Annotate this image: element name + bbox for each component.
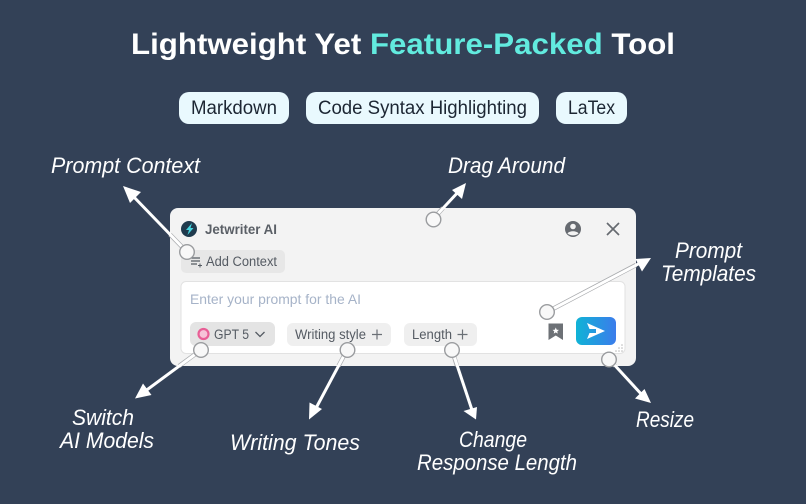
icon: close — [607, 223, 619, 235]
label: Change Response Length — [417, 427, 577, 475]
arrow: drag around — [426, 183, 466, 227]
button: Length — [404, 323, 477, 346]
label: Prompt Templates: Templates — [661, 261, 756, 286]
icon: user profile — [565, 221, 581, 237]
label: Resize: Resize — [636, 407, 694, 432]
icon: Jetwriter logo — [181, 221, 197, 237]
arrow: change response length — [445, 343, 477, 420]
title: Lightweight Yet Feature-Packed Tool — [131, 28, 675, 61]
label: Switch AI Models: Switch — [72, 405, 134, 430]
pill: LaTex — [556, 92, 627, 124]
pill: Code Syntax Highlighting — [306, 92, 539, 124]
button: Writing style — [287, 323, 391, 346]
button: send — [576, 317, 616, 345]
dropdown: GPT 5: GPT 5 — [214, 327, 249, 342]
arrow: prompt context — [123, 186, 194, 259]
label: Drag Around: Drag Around — [448, 153, 566, 178]
icon: resize grip — [615, 344, 623, 352]
label: Prompt Context: Prompt Context — [51, 153, 201, 178]
prompt input — [181, 282, 625, 354]
placeholder text: Enter your prompt for the AI — [190, 291, 361, 307]
label: Writing Tones: Writing Tones — [230, 430, 360, 455]
dropdown: GPT 5 — [190, 322, 275, 346]
arrow: writing tones — [309, 343, 355, 420]
icon: bookmark — [548, 324, 563, 340]
label: Prompt Templates — [661, 238, 756, 286]
label: Prompt Templates: Prompt — [675, 238, 743, 263]
arrow: resize — [602, 352, 651, 403]
arrow: prompt templates — [540, 258, 651, 319]
arrow: switch AI models — [135, 343, 208, 398]
pill: Markdown — [179, 92, 289, 124]
widget name: Jetwriter AI — [205, 222, 277, 237]
label: Switch AI Models — [58, 405, 154, 453]
button: Length: Length — [412, 327, 452, 342]
label: Switch AI Models: AI Models — [58, 428, 154, 453]
button: Add Context: Add Context — [206, 254, 277, 269]
button: Add Context — [181, 250, 285, 273]
label: Change Response Length: Change — [459, 427, 527, 452]
feature pills — [179, 92, 627, 124]
label: Change Response Length: Response Length — [417, 450, 577, 475]
pill: Markdown: Markdown — [191, 98, 277, 119]
panel: Jetwriter AI widget — [170, 208, 636, 366]
button: Writing style: Writing style — [295, 327, 366, 342]
pill: LaTex: LaTex — [568, 98, 615, 119]
pill: Code Syntax Highlighting: Code Syntax Highlighting — [318, 98, 527, 119]
